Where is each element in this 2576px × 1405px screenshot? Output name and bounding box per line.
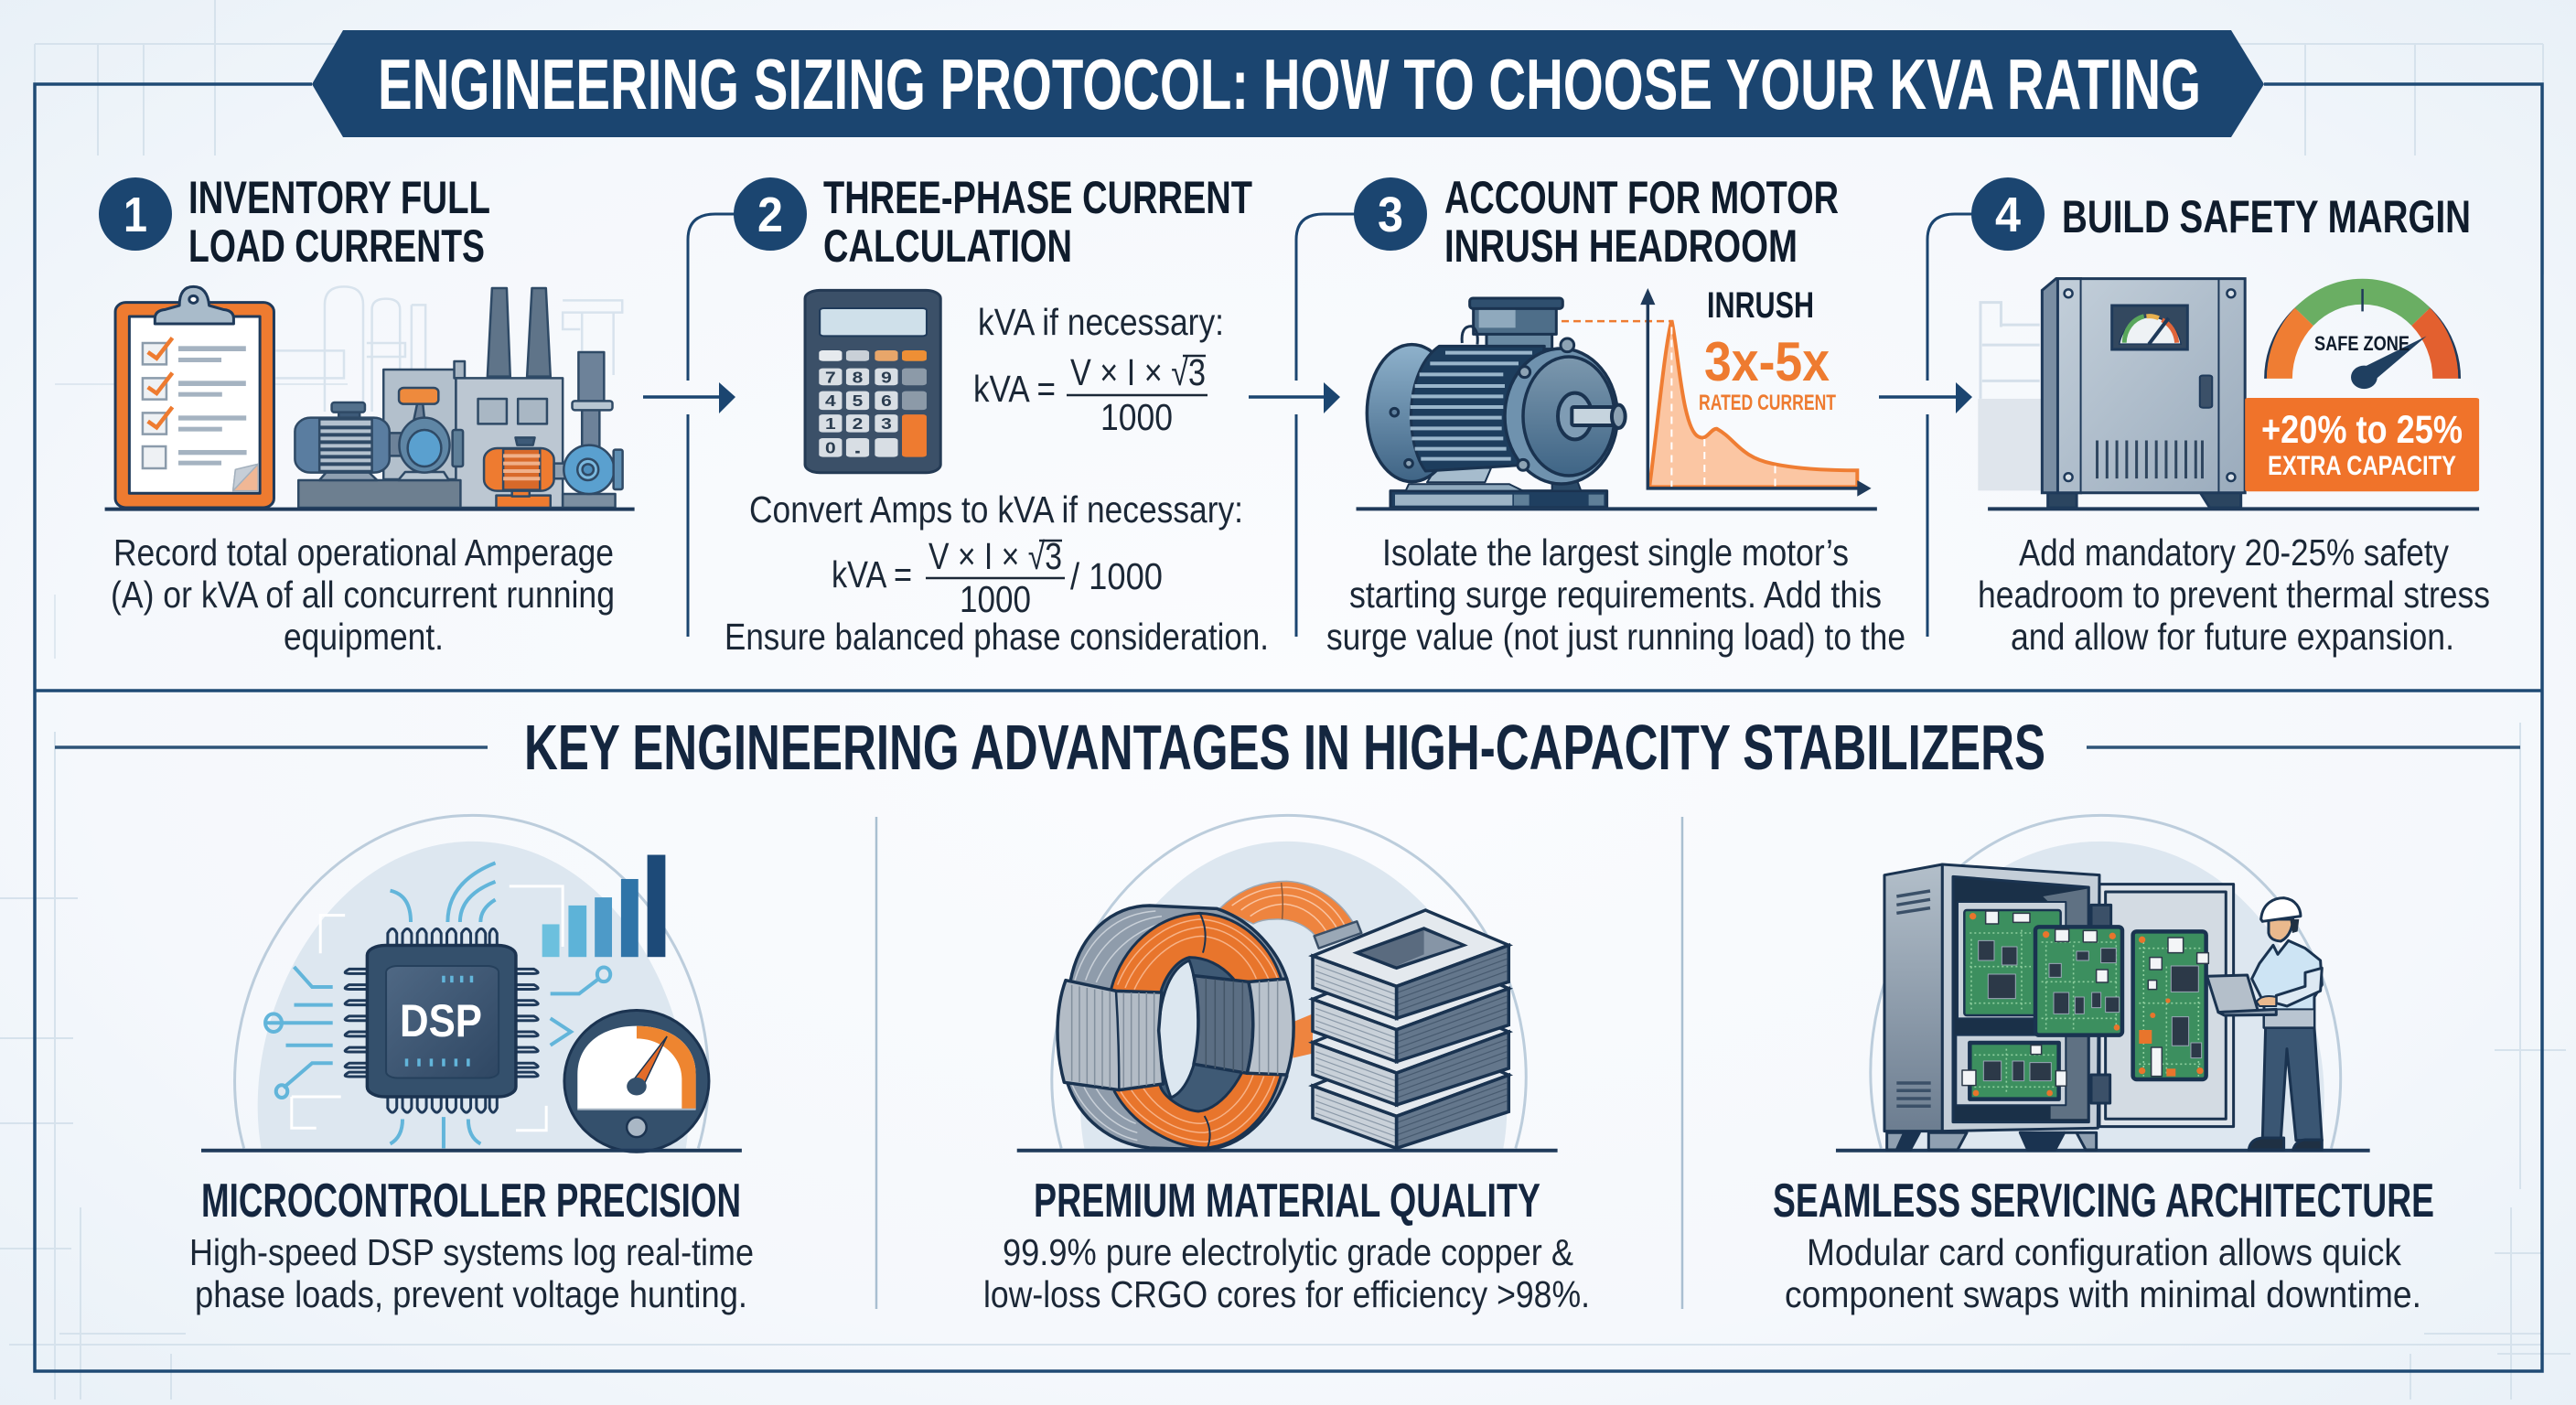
card 1 heading: MICROCONTROLLER PRECISION [201,1174,741,1228]
inrush chart: RATED CURRENT [1699,391,1836,415]
step 4 panel [1971,177,2490,658]
icon: calculator: . [853,438,862,457]
step 2 panel [724,172,1269,658]
step 1 heading: INVENTORY FULL [188,172,490,223]
icon: calculator: 0 [825,438,836,457]
icon: dome backdrop and ground line [1017,815,1558,1151]
card 2 heading: PREMIUM MATERIAL QUALITY [1034,1174,1540,1228]
icon: calculator: 2 [853,414,863,433]
step 1 body text: Record total operational Amperage [113,531,614,574]
icon: calculator: 3 [881,414,892,433]
icon: calculator: 4 [825,391,836,410]
safety gauge: SAFE ZONE [2314,332,2410,355]
card 1 body text: phase loads, prevent voltage hunting. [195,1273,747,1315]
formula 1: V × I × √3 [1070,351,1206,393]
step 3 number badge: 3 [1378,188,1403,242]
step 2 body and formula 2: 1000 [960,578,1031,620]
step 1 body text [111,531,615,658]
icon: DSP chip with bars and gauge [201,815,742,1152]
step 2 heading [823,172,1252,272]
card 1: microcontroller precision [189,815,754,1315]
step 3 body text [1326,531,1905,658]
step 4 body text: Add mandatory 20-25% safety [2019,531,2449,574]
icon: calculator: 8 [853,368,863,386]
step 2 body and formula 2: kVA = [832,553,912,595]
inrush chart: 3x-5x [1704,331,1830,392]
section heading: key advantages: KEY ENGINEERING ADVANTAGES IN HIGH-CAPACITY STABILIZERS [524,712,2045,783]
step 3 heading: ACCOUNT FOR MOTOR [1444,172,1839,223]
icon: calculator: 7 [825,368,836,386]
safety gauge: +20% to 25% [2261,408,2463,452]
step 4 body text [1978,531,2490,658]
step 2 heading: CALCULATION [823,220,1072,272]
step 2 body and formula 2: / 1000 [1070,555,1163,597]
card 3 body text [1785,1231,2421,1315]
title banner [312,30,2264,137]
step 3 heading: INRUSH HEADROOM [1444,220,1798,272]
step 3 body text: surge value (not just running load) to the [1326,616,1905,658]
step 1 heading: LOAD CURRENTS [188,220,485,272]
step 4 body text: and allow for future expansion. [2011,616,2454,658]
formula 1: kVA = [973,368,1056,410]
safety gauge: EXTRA CAPACITY [2268,451,2456,481]
card 3: seamless servicing architecture [1773,815,2434,1315]
step 2 body and formula 2 [724,488,1269,658]
card 3 body text: component swaps with minimal downtime. [1785,1273,2421,1315]
icon: stabilizer cabinet [1978,279,2245,508]
arrow: step 3 to 4 [1879,214,1972,637]
step 4 number badge: 4 [1995,188,2021,242]
arrow: step 1 to 2 [643,214,736,637]
step 3 body text: Isolate the largest single motor’s [1382,531,1849,574]
step 2 number badge [734,177,807,251]
inrush chart [1357,285,1877,509]
card 2: premium material quality [983,815,1590,1315]
step 2 body and formula 2: Convert Amps to kVA if necessary: [749,488,1243,531]
step 3 number badge [1354,177,1427,251]
icon: dome backdrop and ground line [1836,815,2370,1151]
formula 1: kVA if necessary: [978,301,1224,343]
step 2 number badge: 2 [757,188,783,242]
step 3 heading [1444,172,1839,272]
icon: calculator [805,290,940,473]
icon: calculator: 5 [853,391,863,410]
card 3 body text: Modular card configuration allows quick [1807,1231,2401,1273]
step 1 number badge [99,177,172,251]
arrow: step 2 to 3 [1249,214,1355,637]
step 1 heading [188,172,490,272]
card 2 body text: 99.9% pure electrolytic grade copper & [1003,1231,1573,1273]
step 4 body text: headroom to prevent thermal stress [1978,574,2490,616]
card 2 body text: low-loss CRGO cores for efficiency >98%. [983,1273,1590,1315]
icon: motor [1367,298,1626,508]
step 1 body text: (A) or kVA of all concurrent running [111,574,615,616]
icon: calculator: 9 [881,368,892,386]
step 3 body text: starting surge requirements. Add this [1349,574,1882,616]
icon: DSP chip with bars and gauge: DSP [400,995,482,1046]
safety gauge [1988,283,2479,509]
step 1 panel [99,172,635,658]
step 1 number badge: 1 [123,188,147,242]
card 2 body text [983,1231,1590,1315]
card 1 body text [189,1231,754,1315]
icon: copper coil [1057,881,1361,1150]
icon: CRGO core stack [1313,910,1508,1148]
icon: clipboard and factory equipment [105,286,635,509]
step 2 body and formula 2: V × I × √3 [928,535,1062,577]
icon: calculator: 1 [825,414,836,433]
step 2 heading: THREE-PHASE CURRENT [823,172,1252,223]
step 4 number badge [1971,177,2045,251]
icon: calculator: 6 [881,391,892,410]
icon: open cabinet, circuit cards and engineer [1884,864,2322,1150]
card 1 body text: High-speed DSP systems log real-time [189,1231,754,1273]
step 2 body and formula 2: Ensure balanced phase consideration. [724,616,1269,658]
step 3 panel [1326,172,1905,658]
formula 1: 1000 [1100,396,1173,438]
formula 1 [973,301,1224,438]
step 1 body text: equipment. [284,616,444,658]
inrush chart: INRUSH [1707,285,1814,326]
